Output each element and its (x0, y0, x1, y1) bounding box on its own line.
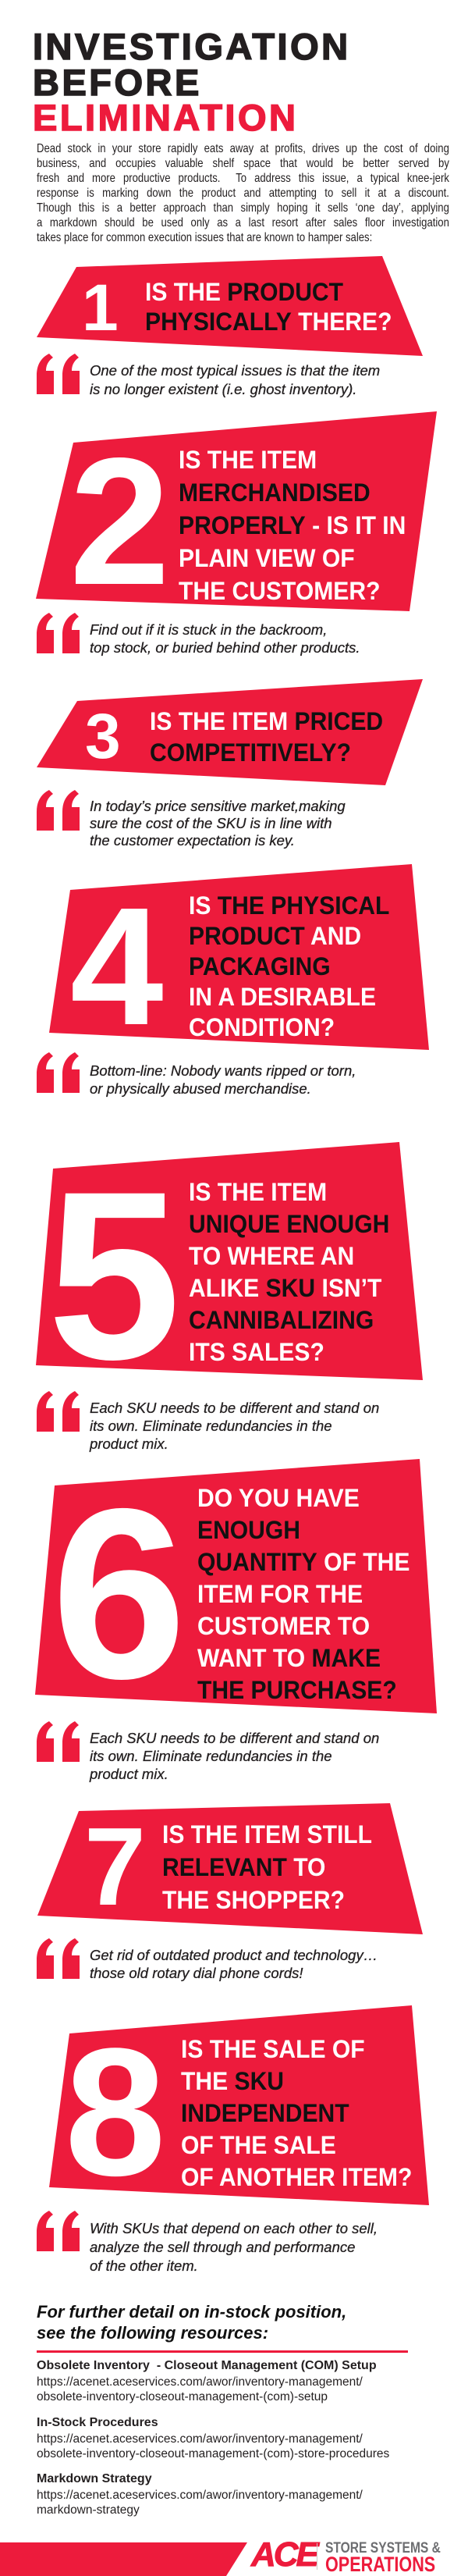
question 2: IS THE ITEM (179, 446, 317, 474)
quote 8: of the other item. (90, 2258, 198, 2274)
question 5: CANNIBALIZING (189, 1306, 374, 1334)
resources heading (37, 2301, 408, 2353)
resources heading: For further detail on in-stock position, (37, 2302, 346, 2322)
question 5: TO WHERE AN (189, 1242, 354, 1270)
title (33, 26, 351, 138)
question 6: CUSTOMER TO (197, 1612, 370, 1640)
question 6: ITEM FOR THE (197, 1580, 363, 1608)
panel 7 (37, 1803, 423, 1934)
resource: obsolete inventory: Obsolete Inventory - Closeout Management (COM) Setup (37, 2359, 377, 2372)
question 2: PLAIN VIEW OF (179, 544, 355, 572)
panel 1 (37, 256, 423, 356)
panel 3 (37, 679, 423, 785)
intro paragraph: business, and occupies valuable shelf space that would be better served by (37, 157, 449, 170)
intro paragraph (37, 142, 449, 244)
quote 2: Find out if it is stuck in the backroom, (90, 621, 327, 638)
question 3: COMPETITIVELY? (150, 738, 351, 767)
title: BEFORE (33, 61, 202, 103)
question 5: IS THE ITEM (189, 1178, 327, 1206)
resource: obsolete inventory: obsolete-inventory-closeout-management-(com)-setup (37, 2390, 328, 2403)
question 6 (197, 1484, 410, 1704)
resource: obsolete inventory: https://acenet.aceservices.com/awor/inventory-management/ (37, 2375, 363, 2389)
number 1: 1 (82, 271, 119, 344)
question 3: IS THE ITEM PRICED (150, 707, 383, 735)
quote 6: product mix. (90, 1766, 168, 1782)
resource: markdown strategy (37, 2472, 363, 2517)
question 2: THE CUSTOMER? (179, 577, 380, 605)
quote 4: Bottom-line: Nobody wants ripped or torn, (90, 1062, 356, 1079)
footer band (0, 2542, 247, 2576)
resource: in-stock procedures: In-Stock Procedures (37, 2416, 158, 2429)
question 8: INDEPENDENT (181, 2099, 349, 2127)
question 7: RELEVANT TO (162, 1853, 325, 1881)
resource: in-stock procedures: https://acenet.aceservices.com/awor/inventory-management/ (37, 2432, 363, 2446)
quote 6 (37, 1721, 379, 1783)
logo: store systems & operations (325, 2539, 441, 2576)
question 1 (145, 278, 392, 336)
question 2: MERCHANDISED (179, 479, 370, 507)
resource: markdown strategy: Markdown Strategy (37, 2472, 152, 2485)
question 5: UNIQUE ENOUGH (189, 1210, 389, 1238)
logo: store systems & operations: OPERATIONS (325, 2553, 435, 2576)
quote 1: One of the most typical issues is that the item (90, 362, 380, 379)
question 4: PACKAGING (189, 952, 331, 980)
quote 7: Get rid of outdated product and technology… (90, 1947, 378, 1963)
question 8: OF ANOTHER ITEM? (181, 2163, 412, 2191)
question 6: DO YOU HAVE (197, 1484, 360, 1512)
title: ELIMINATION (33, 97, 298, 138)
question 8: THE SKU (181, 2067, 284, 2095)
question 8 (181, 2035, 412, 2191)
question 6: THE PURCHASE? (197, 1676, 397, 1704)
quote 3 (37, 790, 346, 849)
quote 1 (37, 354, 380, 398)
quote 7: those old rotary dial phone cords! (90, 1965, 303, 1981)
resource: obsolete inventory (37, 2359, 377, 2403)
intro paragraph: Dead stock in your store rapidly eats away at profits, drives up the cost of doing (37, 142, 449, 155)
question 5 (189, 1178, 389, 1366)
quote 2 (37, 613, 360, 656)
question 6: WANT TO MAKE (197, 1644, 381, 1672)
quote 1: is no longer existent (i.e. ghost inventory). (90, 381, 356, 397)
logo: store systems & operations: STORE SYSTEMS & (325, 2539, 441, 2556)
resource: markdown strategy: https://acenet.aceservices.com/awor/inventory-management/ (37, 2489, 363, 2502)
panel 2 (36, 411, 437, 623)
logo: ACE: ACE (251, 2535, 317, 2574)
question 3 (150, 707, 383, 767)
panel 4 (49, 864, 429, 1060)
question 5: ITS SALES? (189, 1338, 324, 1366)
quote 8: analyze the sell through and performance (90, 2239, 355, 2255)
quote 3: sure the cost of the SKU is in line with (90, 815, 332, 831)
question 4: PRODUCT AND (189, 922, 361, 950)
number 4: 4 (70, 872, 164, 1060)
question 1: IS THE PRODUCT (145, 278, 343, 306)
question 4: IS THE PHYSICAL (189, 891, 389, 920)
question 1: PHYSICALLY THERE? (145, 308, 392, 336)
quote 8 (37, 2211, 378, 2274)
quote 3: the customer expectation is key. (90, 832, 295, 849)
quote 5: Each SKU needs to be different and stand on (90, 1400, 379, 1416)
question 7: THE SHOPPER? (162, 1886, 345, 1914)
number 2: 2 (69, 421, 170, 623)
quote 8: With SKUs that depend on each other to sell, (90, 2220, 378, 2236)
intro paragraph: a markdown should be used only as a last resort after sales floor investigation (37, 216, 449, 229)
question 6: ENOUGH (197, 1516, 300, 1544)
intro paragraph: fresh and more productive products. To address this issue, a typical knee-jerk (37, 172, 449, 185)
panel 5 (36, 1142, 423, 1410)
quote 5: its own. Eliminate redundancies in the (90, 1418, 332, 1434)
resources heading: see the following resources: (37, 2323, 268, 2343)
number 3: 3 (85, 701, 121, 772)
resource: in-stock procedures (37, 2416, 389, 2460)
quote 2: top stock, or buried behind other products. (90, 639, 360, 656)
quote 6: Each SKU needs to be different and stand on (90, 1730, 379, 1746)
panel 8 (49, 2005, 429, 2214)
quote 4: or physically abused merchandise. (90, 1080, 311, 1097)
intro paragraph: takes place for common execution issues that are known to hamper sales: (37, 231, 372, 244)
resource: in-stock procedures: obsolete-inventory-closeout-management-(com)-store-procedures (37, 2446, 389, 2460)
panel 6 (35, 1457, 437, 1729)
number 7: 7 (84, 1805, 146, 1929)
quote 3: In today’s price sensitive market,making (90, 798, 346, 814)
resource: markdown strategy: markdown-strategy (37, 2503, 140, 2517)
question 8: OF THE SALE (181, 2131, 336, 2159)
question 4: IN A DESIRABLE (189, 983, 376, 1011)
question 7: IS THE ITEM STILL (162, 1820, 372, 1848)
quote 6: its own. Eliminate redundancies in the (90, 1748, 332, 1764)
intro paragraph: Though this is a better approach than simply hoping it sells ‘one day’, applying (37, 201, 449, 215)
question 4 (189, 891, 389, 1041)
question 8: IS THE SALE OF (181, 2035, 365, 2063)
quote 4 (37, 1052, 356, 1098)
question 4: CONDITION? (189, 1013, 335, 1041)
question 6: QUANTITY OF THE (197, 1548, 410, 1576)
number 5: 5 (48, 1142, 181, 1410)
title: INVESTIGATION (33, 26, 351, 67)
question 2: PROPERLY - IS IT IN (179, 511, 406, 539)
question 2 (179, 446, 406, 605)
number 6: 6 (51, 1457, 186, 1729)
quote 5: product mix. (90, 1436, 168, 1452)
question 5: ALIKE SKU ISN’T (189, 1274, 381, 1302)
question 7 (162, 1820, 372, 1914)
intro paragraph: response is marking down the product and attempting to sell it at a discount. (37, 187, 449, 200)
number 8: 8 (65, 2011, 166, 2214)
quote 7 (37, 1938, 378, 1981)
quote 5 (37, 1391, 379, 1452)
